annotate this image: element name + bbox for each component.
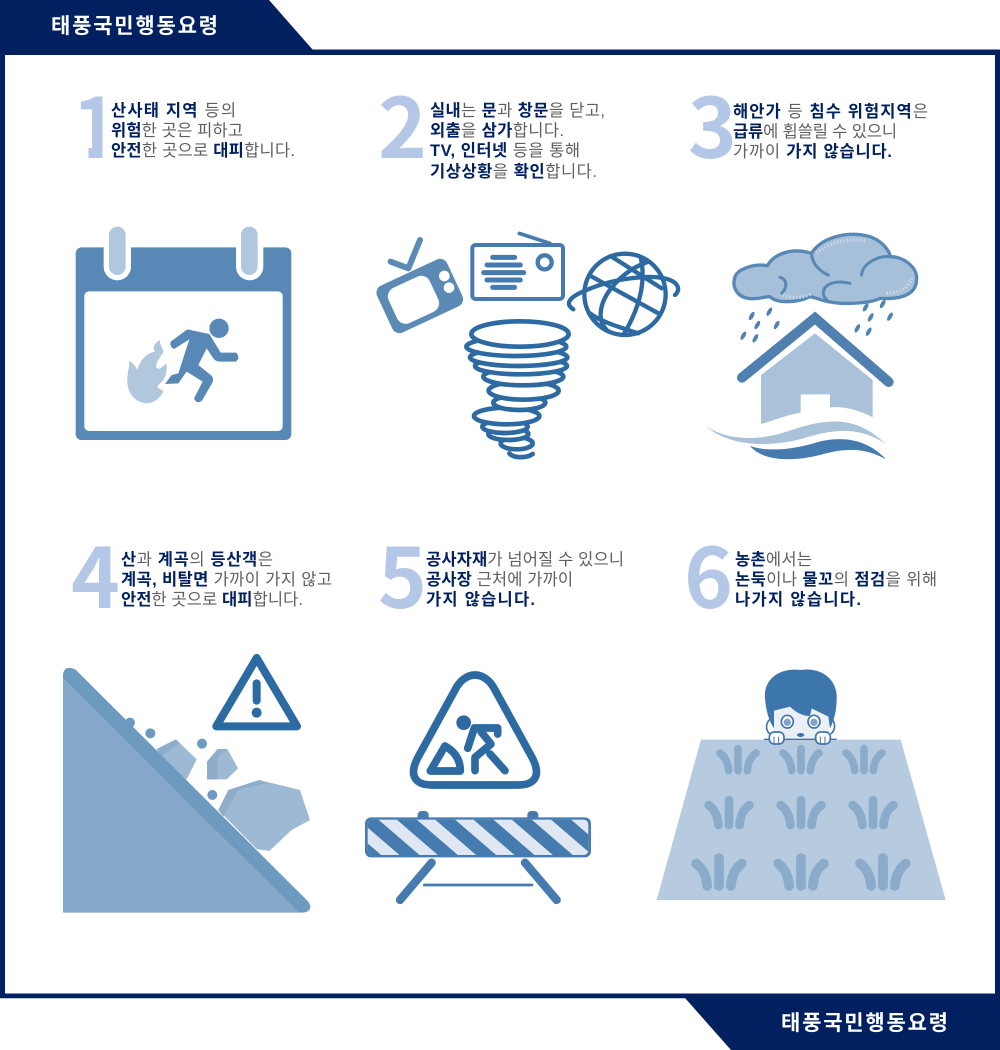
text block 6 [735,550,937,609]
panel: step 4 [63,512,332,913]
text block 1: 산사태 지역 등의 [111,101,236,120]
text block 1: 안전한 곳으로 대피합니다. [111,141,295,160]
number 5: 5 [378,512,427,632]
text block 6: 논둑이나 물꼬의 점검을 위해 [735,570,937,589]
icon: globe [569,254,678,335]
icon: construction sign [414,675,536,785]
text block 2: 실내는 문과 창문을 닫고, [430,101,605,120]
text block 2: TV, 인터넷 등을 통해 [430,141,580,160]
icon: landslide with falling rocks [63,668,310,913]
icon: boy peeking over the field [764,669,837,744]
text block 3 [733,102,928,161]
text block 1: 위험한 곳은 피하고 [111,121,243,140]
text block 2 [430,101,605,181]
icon: tornado [466,321,569,457]
panel: step 2 [374,62,678,457]
top title tab: 태풍국민행동요령 [51,15,218,38]
text block 6: 농촌에서는 [735,550,812,569]
text block 5 [426,550,624,609]
panel: step 6 [657,512,946,900]
text block 1 [111,101,295,160]
number 6: 6 [684,512,733,632]
icon: radio [472,233,563,299]
text block 3: 해안가 등 침수 위험지역은 [733,102,928,121]
text block 4 [121,550,332,609]
icon: calendar with running person and fire [76,227,291,440]
icon: flooded house [706,318,889,459]
text block 2: 기상상황을 확인합니다. [430,162,597,181]
panel: step 3 [688,62,928,459]
text block 4: 계곡, 비탈면 가까이 가지 않고 [121,570,332,589]
bottom title tab: 태풍국민행동요령 [781,1012,948,1035]
panel: step 1 [76,96,294,440]
number 4: 4 [71,512,120,632]
icon: warning triangle [216,658,297,726]
text block 2: 외출을 삼가합니다. [430,121,564,140]
icon: striped road barrier [365,811,591,904]
text block 5: 공사장 근처에 가까이 [426,570,573,589]
text block 5: 가지 않습니다. [426,590,535,609]
number 1: 1 [72,62,121,182]
text block 6: 나가지 않습니다. [735,590,861,609]
icon: rice paddy field [657,740,946,900]
number 3: 3 [688,62,737,182]
text block 4: 산과 계곡의 등산객은 [121,550,273,569]
text block 3: 급류에 휩쓸릴 수 있으니 [733,122,897,141]
text block 3: 가까이 가지 않습니다. [733,142,892,161]
icon: television [374,240,466,336]
number 2: 2 [378,62,427,182]
text block 5: 공사자재가 넘어질 수 있으니 [426,550,624,569]
icon: storm cloud with rain [734,234,917,343]
panel: step 5 [365,546,622,904]
text block 4: 안전한 곳으로 대피합니다. [121,590,303,609]
